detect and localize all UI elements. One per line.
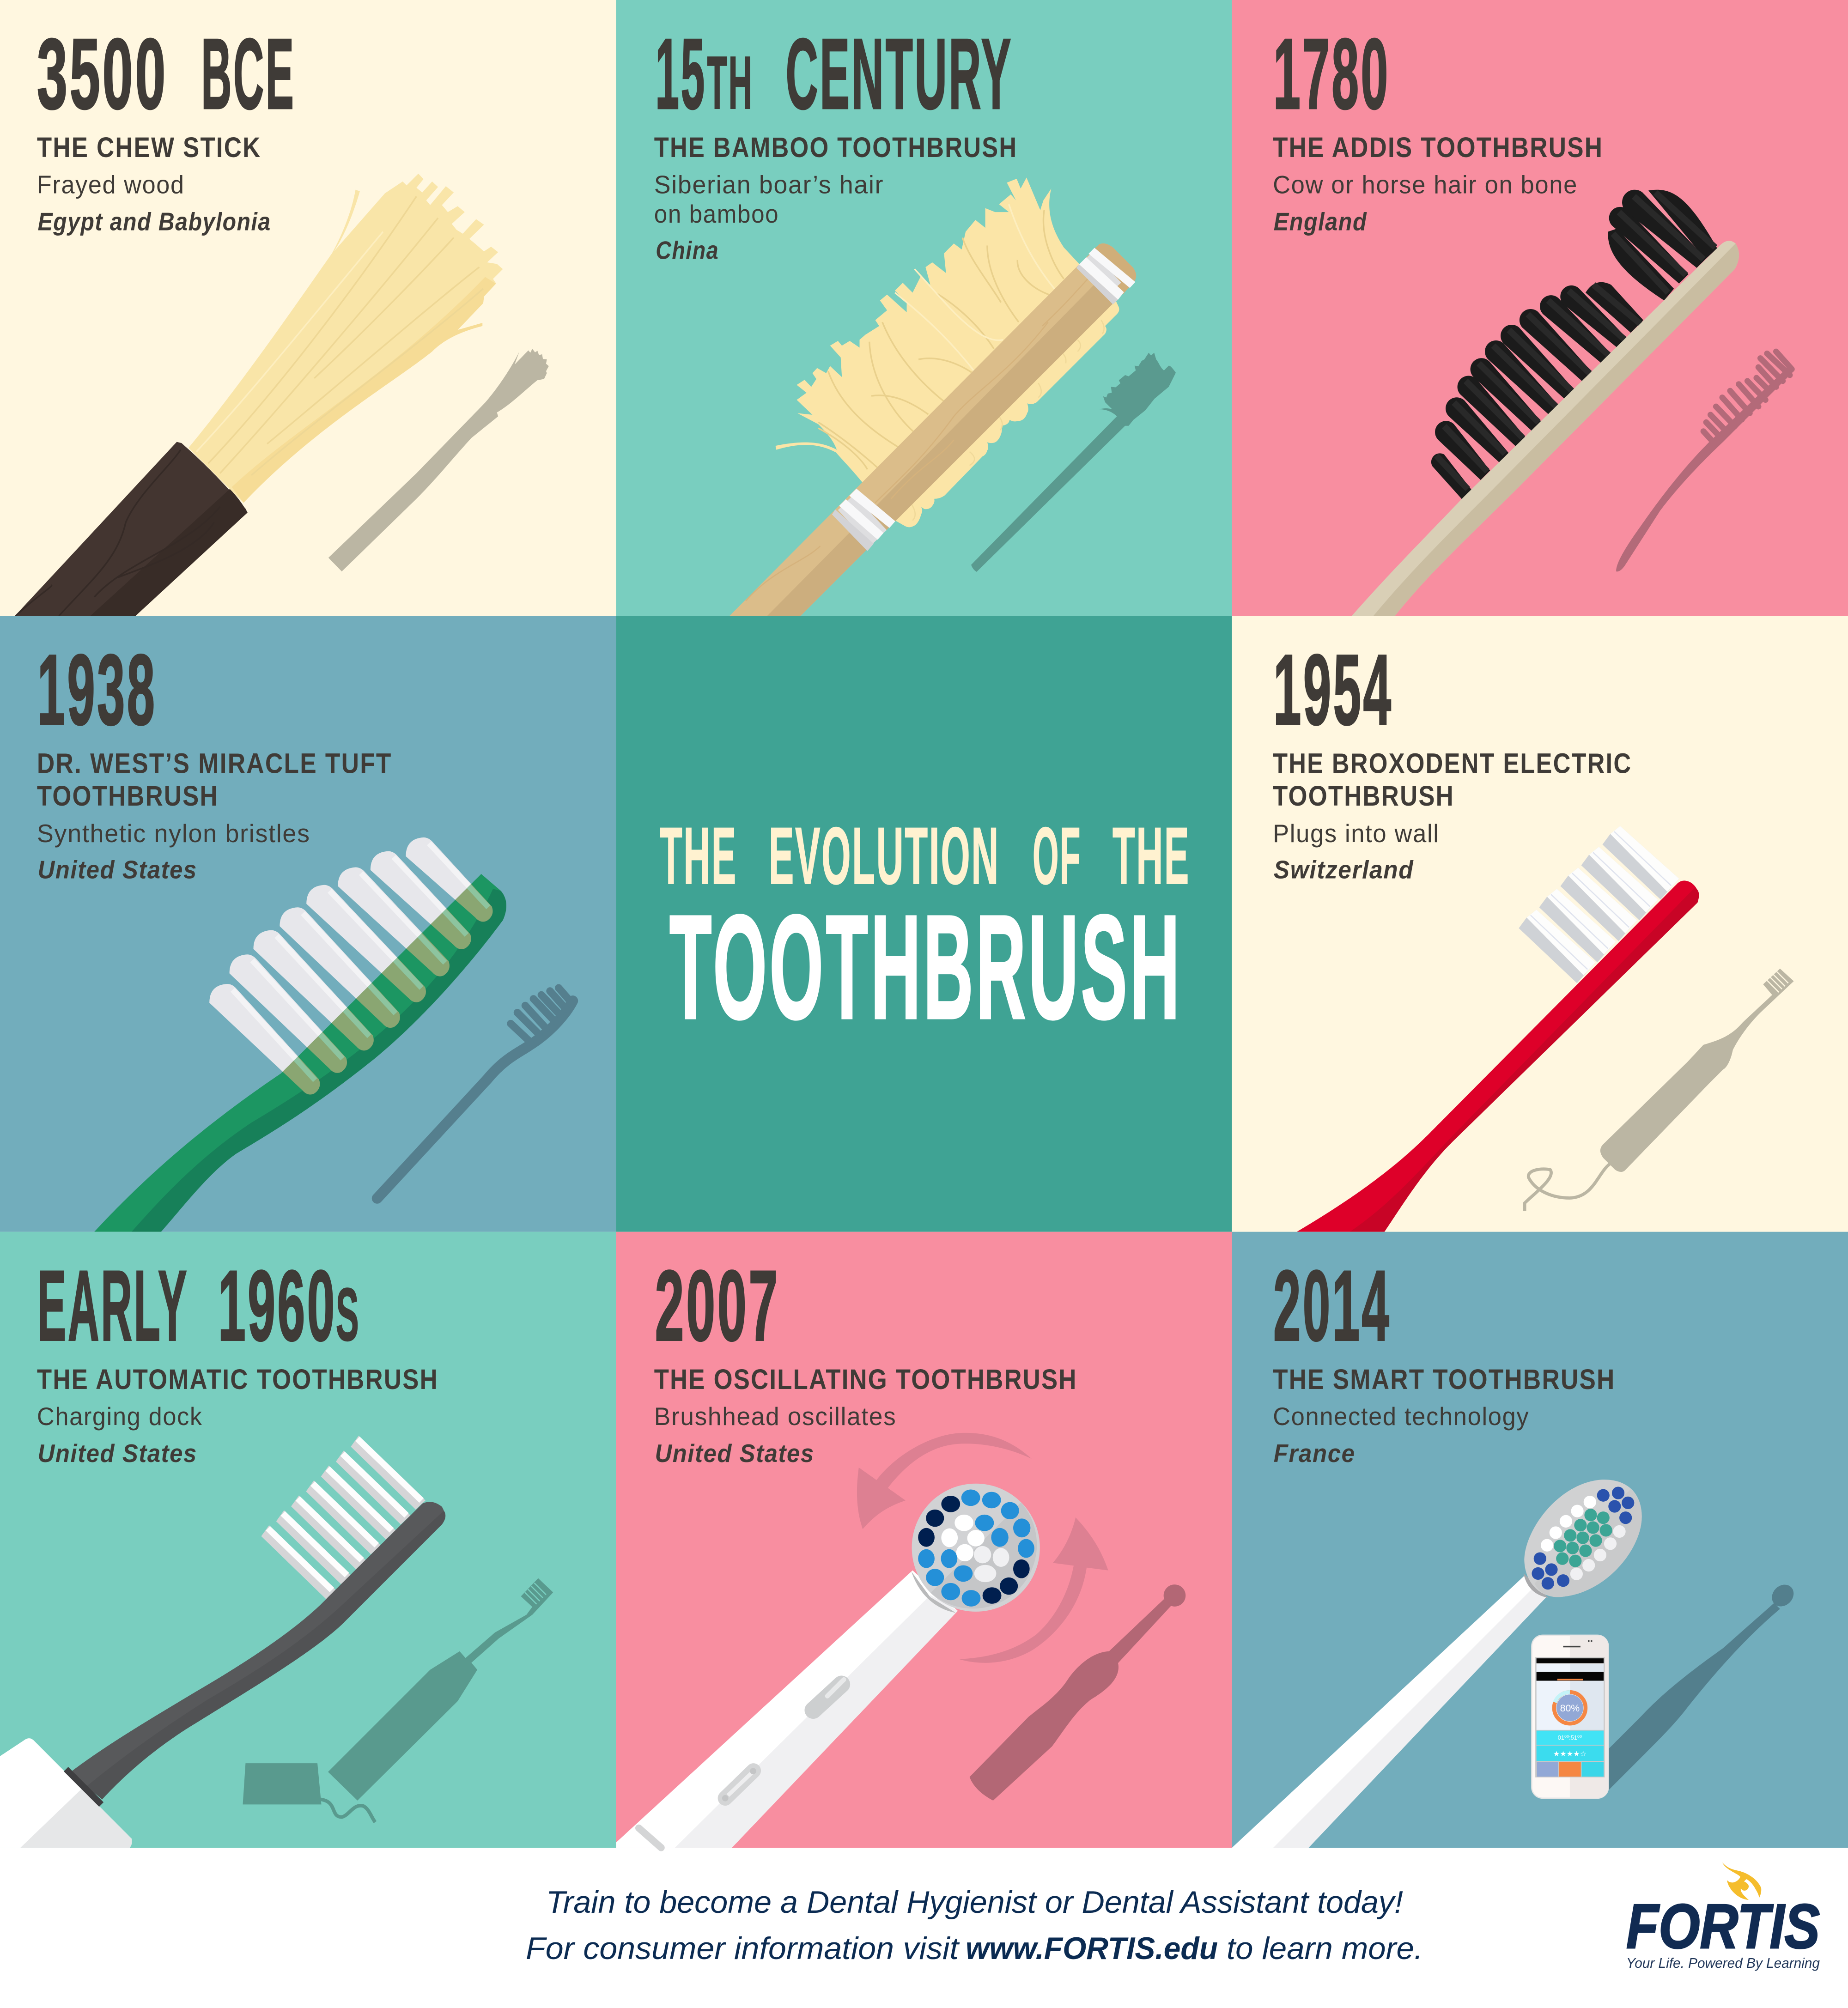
panel: 15th century bamboo: CENTURY	[786, 18, 1013, 130]
icon: flame	[1722, 1862, 1761, 1900]
panel: 2007 oscillating	[616, 1232, 1232, 1848]
arrows: rotation	[857, 1433, 1108, 1663]
place: China	[656, 236, 719, 264]
name: the broxodent electric toothbrush: TOOTHBRUSH	[1273, 780, 1454, 812]
name: the broxodent electric toothbrush	[1273, 747, 1632, 812]
title line: the evolution of the	[660, 811, 1190, 901]
panel: 1938 dr west	[0, 616, 616, 1232]
description: Brushhead oscillates	[654, 1402, 896, 1431]
title line: the evolution of the: THE	[660, 811, 737, 901]
shadow silhouette: addis brush	[1616, 352, 1794, 571]
panel: 1954 broxodent	[1232, 616, 1848, 1232]
heading: 15th century: TH	[707, 42, 754, 125]
panel: 2014 smart	[1232, 1232, 1848, 1848]
name: the chew stick: THE CHEW STICK	[37, 132, 261, 163]
place: United States	[655, 1439, 815, 1468]
place: Egypt and Babylonia	[38, 207, 271, 236]
bindings	[832, 248, 1135, 551]
illustration: electric toothbrush	[1297, 826, 1794, 1232]
footer: call to action: Train to become a Dental Hygienist or Dental Assistant today!	[546, 1885, 1403, 1920]
heading: early 1960s: 1960	[218, 1250, 337, 1361]
heading: 1938: 1938	[37, 634, 157, 746]
description: Cow or horse hair on bone	[1273, 170, 1578, 199]
place: United States	[38, 855, 197, 884]
illustration: nylon toothbrush	[94, 837, 573, 1232]
illustration: bamboo toothbrush	[729, 177, 1176, 616]
heading: 3500 BCE: 3500	[37, 18, 168, 130]
bristle dots	[1532, 1487, 1634, 1589]
panel: early 1960s automatic: S	[336, 1273, 360, 1356]
panel: early 1960s automatic	[0, 1232, 616, 1848]
name: the addis toothbrush: THE ADDIS TOOTHBRUSH	[1273, 132, 1603, 163]
place: Switzerland	[1274, 855, 1414, 884]
description: Siberian boar’s hair	[654, 170, 884, 199]
shadow silhouette: oscillating brush	[970, 1584, 1185, 1801]
footer: call to action	[526, 1885, 1423, 1966]
title line: the evolution of the: EVOLUTION	[769, 811, 1000, 901]
place: United States	[38, 1439, 197, 1468]
name: dr west's miracle tuft toothbrush: DR. WEST’S MIRACLE TUFT	[37, 747, 392, 779]
description: Frayed wood	[37, 170, 185, 199]
description: on bamboo	[654, 200, 779, 228]
footer: call to action: www.FORTIS.edu	[966, 1931, 1218, 1966]
phone app: 80%	[1560, 1703, 1580, 1714]
panel: 3500 BCE chew stick: BCE	[201, 18, 295, 130]
phone app: 01⁰⁰:51⁰⁰	[1558, 1734, 1582, 1741]
phone app: ★★★★☆	[1553, 1749, 1587, 1758]
panel: title: TOOTHBRUSH	[669, 884, 1182, 1049]
description: Plugs into wall	[1273, 819, 1440, 848]
panel: 2014 smart: 2014	[1273, 1250, 1391, 1361]
shadow silhouette: electric brush with cord	[1525, 969, 1794, 1211]
illustration: automatic toothbrush	[0, 1436, 553, 1848]
name: dr west's miracle tuft toothbrush	[37, 747, 392, 812]
name: the broxodent electric toothbrush: THE BROXODENT ELECTRIC	[1273, 747, 1632, 779]
illustration: smart brush	[1232, 1480, 1642, 1848]
description: Synthetic nylon bristles	[37, 819, 310, 848]
illustration: addis toothbrush	[1352, 190, 1794, 616]
description: Connected technology	[1273, 1402, 1529, 1431]
bristle dots	[918, 1489, 1034, 1607]
title line: the evolution of the: OF	[1033, 811, 1082, 901]
shadow silhouette: smart brush	[1605, 1580, 1798, 1794]
name: the automatic toothbrush: THE AUTOMATIC TOOTHBRUSH	[37, 1364, 438, 1395]
shadow silhouette: bamboo brush	[971, 353, 1176, 572]
footer: call to action: For consumer information visit	[526, 1931, 960, 1966]
heading: 1954: 1954	[1273, 634, 1393, 746]
shadow silhouette: automatic brush and dock	[243, 1578, 553, 1822]
place: England	[1274, 207, 1367, 236]
phone app	[1532, 1635, 1608, 1798]
name: the oscillating toothbrush: THE OSCILLATING TOOTHBRUSH	[654, 1364, 1077, 1395]
panel: 15th century bamboo	[616, 0, 1232, 616]
name: the bamboo toothbrush: THE BAMBOO TOOTHBRUSH	[654, 132, 1017, 163]
description	[654, 170, 884, 228]
panel: 3500 BCE chew stick	[0, 0, 616, 616]
illustration: chew stick	[15, 174, 549, 616]
shadow silhouette: chew stick	[328, 349, 549, 571]
buttons	[722, 1680, 844, 1802]
logo: fortis	[1626, 1862, 1820, 1971]
heading: early 1960s: EARLY	[37, 1250, 188, 1361]
heading: 2007: 2007	[655, 1250, 780, 1361]
shadow silhouette: nylon brush	[377, 988, 573, 1198]
heading: 15th century	[655, 18, 1013, 130]
logo: fortis: Your Life. Powered By Learning	[1626, 1955, 1820, 1971]
panel: 1780 addis	[1232, 0, 1848, 616]
illustration: oscillating brush	[616, 1484, 1040, 1848]
panel: title	[616, 616, 1232, 1232]
heading: 15th century: 15	[655, 18, 706, 130]
name: dr west's miracle tuft toothbrush: TOOTHBRUSH	[37, 780, 219, 812]
panel: 1780 addis: 1780	[1273, 18, 1390, 130]
name: the smart toothbrush: THE SMART TOOTHBRUSH	[1273, 1364, 1616, 1395]
footer: call to action: to learn more.	[1227, 1931, 1423, 1966]
charging dock	[0, 1738, 132, 1848]
description: Charging dock	[37, 1402, 203, 1431]
place: France	[1274, 1439, 1356, 1468]
panel: title: THE	[1112, 811, 1190, 901]
